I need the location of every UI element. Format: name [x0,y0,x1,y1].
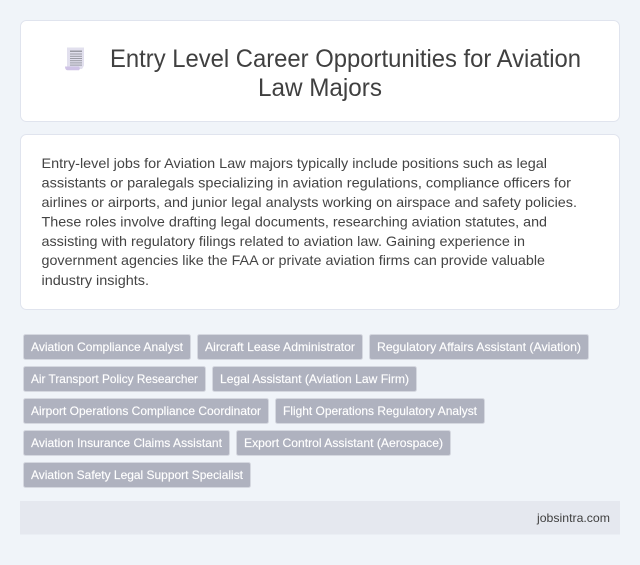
tag: Air Transport Policy Researcher: Air Transport Policy Researcher [31,372,198,386]
text block: description: industry insights. [42,272,149,288]
tag: Aviation Compliance Analyst [24,334,190,360]
footer source text: jobsintra.com [536,511,610,525]
tag: Aviation Compliance Analyst: Aviation Compliance Analyst [31,340,184,354]
tag: Flight Operations Regulatory Analyst: Flight Operations Regulatory Analyst [283,404,478,418]
panel: header [20,20,620,122]
text block: description [42,155,577,288]
text block: description: airlines or airports, and junior legal analysts working on airspace and safety policies. [42,194,577,210]
tag: Aviation Safety Legal Support Specialist [24,462,250,488]
panel: description [20,134,620,310]
tag: Airport Operations Compliance Coordinator [24,398,268,424]
tag: Export Control Assistant (Aerospace) [236,430,450,456]
tag: Aviation Insurance Claims Assistant [24,430,230,456]
text block: description: assistants or paralegals specializing in aviation regulations, compliance officers for [42,174,571,190]
tag list [24,334,588,488]
tag: Export Control Assistant (Aerospace): Export Control Assistant (Aerospace) [244,436,443,450]
tag: Aircraft Lease Administrator: Aircraft Lease Administrator [205,340,355,354]
tag: Aircraft Lease Administrator [198,334,362,360]
tag: Airport Operations Compliance Coordinator: Airport Operations Compliance Coordinator [31,404,261,418]
title: Law Majors [258,74,382,102]
tag: Air Transport Policy Researcher [24,366,206,392]
text block: description: assisting with regulatory filings related to aviation law. Gaining experience in [42,233,525,249]
text block: description: These roles involve drafting legal documents, researching aviation statutes, and [42,214,547,230]
icon: document scroll [65,48,84,70]
tag: Aviation Insurance Claims Assistant: Aviation Insurance Claims Assistant [31,436,223,450]
text block: description: government agencies like the FAA or private aviation firms can provide valuable [42,252,545,268]
tag: Aviation Safety Legal Support Specialist: Aviation Safety Legal Support Specialist [31,468,244,482]
footer [20,501,620,534]
title: Entry Level Career Opportunities for Aviation [110,45,581,73]
tag: Legal Assistant (Aviation Law Firm): Legal Assistant (Aviation Law Firm) [220,372,409,386]
title [110,45,581,102]
tag: Regulatory Affairs Assistant (Aviation) [370,334,588,360]
text block: description: Entry-level jobs for Aviation Law majors typically include positions such as legal [42,155,547,171]
tag: Regulatory Affairs Assistant (Aviation): Regulatory Affairs Assistant (Aviation) [377,340,581,354]
tag: Flight Operations Regulatory Analyst [276,398,484,424]
tag: Legal Assistant (Aviation Law Firm) [212,366,416,392]
